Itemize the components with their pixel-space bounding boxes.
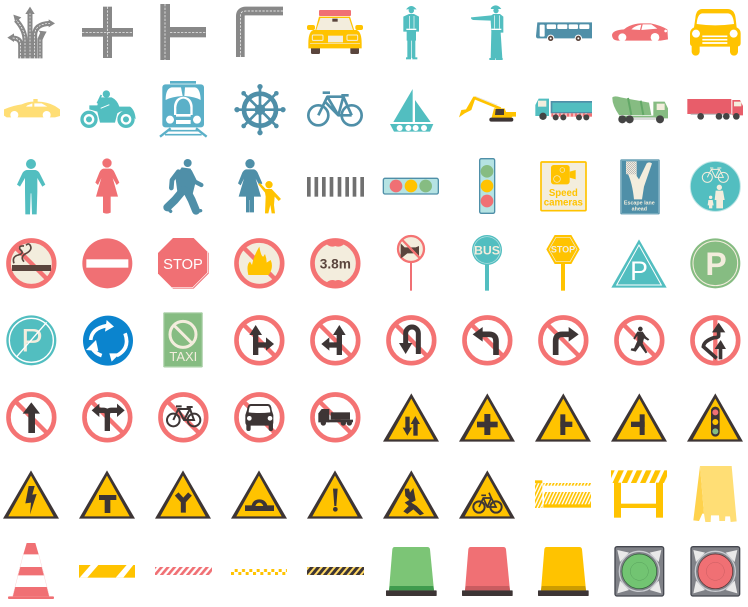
- icon: red car: [612, 23, 668, 42]
- icon: no left turn: [464, 317, 510, 363]
- icon: red truck: [687, 99, 743, 120]
- icon: T road: [160, 4, 206, 60]
- icon: no bicycles: [160, 394, 206, 440]
- icon: no smoking: [8, 240, 54, 286]
- icon: cycle and pedestrian sign: [690, 161, 740, 211]
- icon: side road left warning: [611, 393, 667, 442]
- row block: warning signs and cone: [3, 470, 364, 599]
- icon: speed cameras sign: [541, 162, 586, 211]
- icon: red push button: [691, 547, 740, 596]
- icon: no left or right: [84, 394, 130, 440]
- icon: no overtaking: [692, 317, 738, 364]
- icon: no horn sign on pole: [398, 236, 424, 291]
- icon: traffic officer standing: [403, 6, 419, 59]
- row block: regulatory signs left: [6, 312, 358, 440]
- icon: parking circle: P: [705, 246, 727, 282]
- icon: man: [17, 159, 45, 214]
- icon: excavator: [459, 97, 516, 122]
- icon: teal truck: [535, 99, 592, 120]
- row block: roads and vehicles left: [4, 4, 363, 137]
- icon: escape lane sign: Escape lane: [624, 201, 655, 207]
- row block: signals and signs right: [383, 159, 740, 291]
- icon: escape lane sign: [620, 159, 660, 214]
- icon: horizontal traffic light: [383, 178, 438, 194]
- icon: stop hexagon sign: [546, 235, 580, 291]
- icon: road works barricade: [611, 470, 667, 518]
- icon: high voltage warning: [3, 470, 59, 519]
- icon: road bend: [240, 11, 283, 57]
- icon: bus stop sign: BUS: [474, 244, 500, 258]
- icon: falling person warning: [383, 470, 439, 519]
- icon: ship wheel: [234, 84, 286, 135]
- icon: motorcycle: [82, 90, 136, 126]
- icon: bus stop sign: [472, 235, 502, 291]
- icon: side road right warning: [535, 393, 591, 442]
- icon: no entry: [82, 238, 132, 288]
- row block: barriers and beacons: [383, 466, 740, 596]
- icon: traffic cone: [8, 543, 54, 599]
- icon: bus: [536, 22, 592, 42]
- icon: yellow car front: [690, 9, 741, 56]
- icon: traffic light warning: [687, 393, 743, 442]
- icon: no right turn: [540, 317, 586, 363]
- icon: Y junction warning: [155, 470, 211, 519]
- icon: no trucks: [312, 394, 358, 440]
- icon: no parking: [6, 315, 56, 365]
- icon: vertical traffic light: [480, 159, 495, 213]
- icon: green beacon: [386, 547, 437, 596]
- icon: speed cameras sign: cameras: [544, 198, 583, 209]
- icon: no fire: [236, 240, 282, 286]
- icon: no straight or right: [236, 317, 282, 363]
- icon: zebra crossing: [307, 177, 364, 197]
- icon: no taxi sign: [163, 312, 203, 367]
- icon: multi-way junction: [7, 7, 55, 58]
- icon: roundabout: [83, 316, 133, 366]
- row block: pedestrians and prohibition signs left: [8, 158, 364, 289]
- icon: parking triangle: P: [630, 256, 648, 286]
- icon: stop octagon: STOP: [163, 257, 203, 273]
- icon: green push button: [615, 547, 664, 596]
- icon: yellow checkered tape: [231, 569, 287, 575]
- icon: stop octagon: [158, 238, 209, 289]
- icon: mother and child: [238, 159, 281, 213]
- icon: no pedestrians: [616, 317, 662, 363]
- icon: no parking: P: [21, 322, 43, 359]
- icon: height limit 3.8m: 3.8m: [320, 256, 351, 271]
- row block: officers and vehicles right: [390, 5, 743, 132]
- icon: parking circle: [690, 238, 740, 288]
- icon: folding A-frame sign: [693, 466, 737, 522]
- icon: barrier with hatching: [535, 480, 591, 508]
- icon: no taxi sign: TAXI: [169, 349, 197, 364]
- icon: no cars: [236, 394, 282, 440]
- icon: woman: [95, 158, 119, 214]
- icon: escape lane sign: ahead: [632, 206, 647, 212]
- icon: general warning: [307, 470, 363, 519]
- icon: no u-turn: [388, 317, 434, 363]
- icon: height limit 3.8m: [312, 240, 358, 287]
- row block: regulatory and warning signs right: [383, 317, 743, 442]
- icon: yellow beacon: [538, 547, 589, 596]
- icon: bicycle: [308, 93, 362, 125]
- icon: red beacon: [462, 547, 513, 596]
- icon: concrete mixer: [612, 96, 668, 123]
- icon: police car: [307, 10, 363, 54]
- icon: stop hexagon sign: STOP: [551, 245, 575, 255]
- icon: two-way traffic warning: [383, 393, 439, 442]
- icon: sailboat: [390, 89, 433, 132]
- icon: no straight: [8, 394, 54, 440]
- icon: train: [160, 81, 207, 137]
- icon: black and yellow striped tape: [307, 567, 364, 575]
- icon: crossroad: [82, 7, 133, 58]
- icon: taxi: [4, 99, 60, 119]
- icon: no straight or left: [312, 317, 358, 363]
- icon: speed cameras sign: Speed: [549, 188, 578, 199]
- icon: red striped tape: [155, 567, 212, 575]
- icon: yellow barrier tape: [79, 565, 135, 578]
- icon: motorcycle warning: [459, 470, 515, 519]
- icon: walking man: [166, 159, 201, 212]
- icon: parking triangle: [611, 239, 667, 288]
- icon: T junction warning: [79, 470, 135, 519]
- icon: traffic officer pointing: [471, 5, 503, 60]
- icon: crossroads warning: [459, 393, 515, 442]
- icon: bump warning: [231, 470, 287, 519]
